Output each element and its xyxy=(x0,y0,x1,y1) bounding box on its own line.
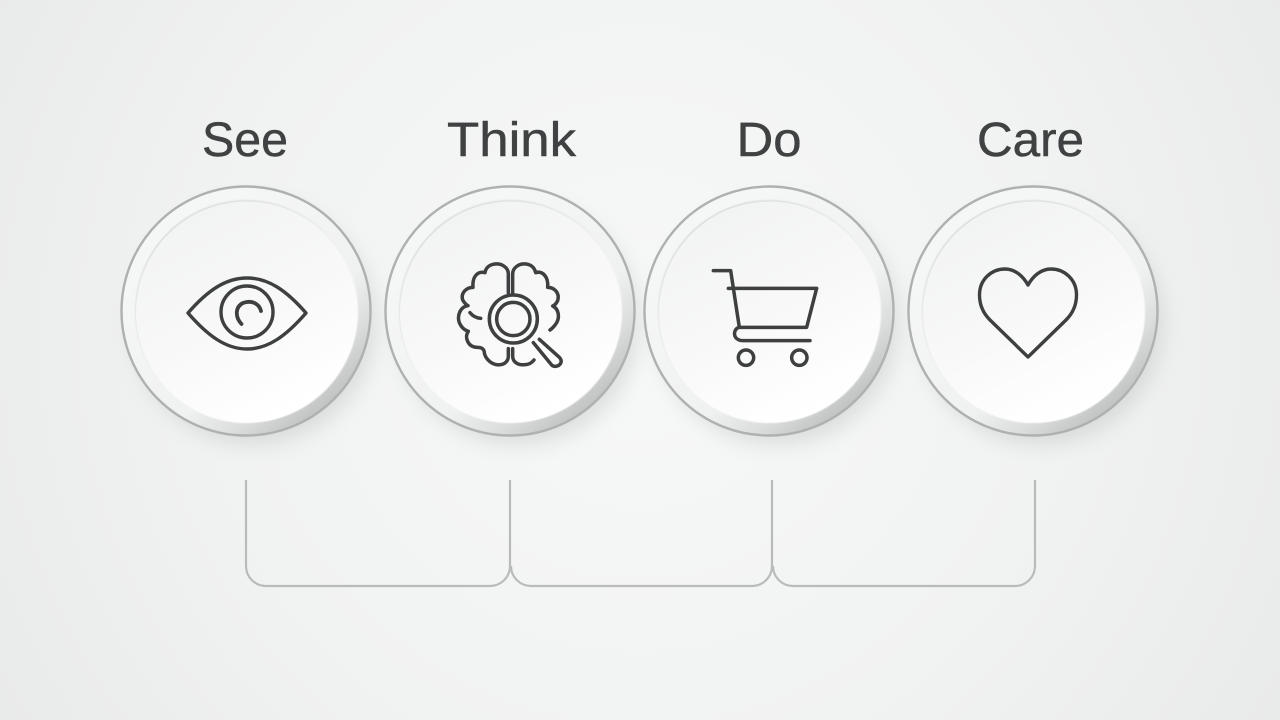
connector: See to Think xyxy=(246,480,510,586)
heading: Care: Care xyxy=(977,114,1084,167)
heading: Think: Think xyxy=(447,114,577,167)
icon: brain with magnifier xyxy=(459,264,561,366)
button: Do xyxy=(644,186,899,445)
button: See xyxy=(122,186,376,445)
bracket connectors xyxy=(246,480,1035,586)
icon: eye xyxy=(188,278,306,349)
icon: heart xyxy=(980,269,1076,357)
button: Think xyxy=(386,186,640,445)
heading: See: See xyxy=(202,114,288,167)
button: Care xyxy=(908,186,1163,445)
heading: Do: Do xyxy=(736,114,802,167)
icon: shopping cart xyxy=(713,271,817,365)
connector: Do to Care xyxy=(773,480,1035,586)
connector: Think to Do xyxy=(511,480,772,586)
